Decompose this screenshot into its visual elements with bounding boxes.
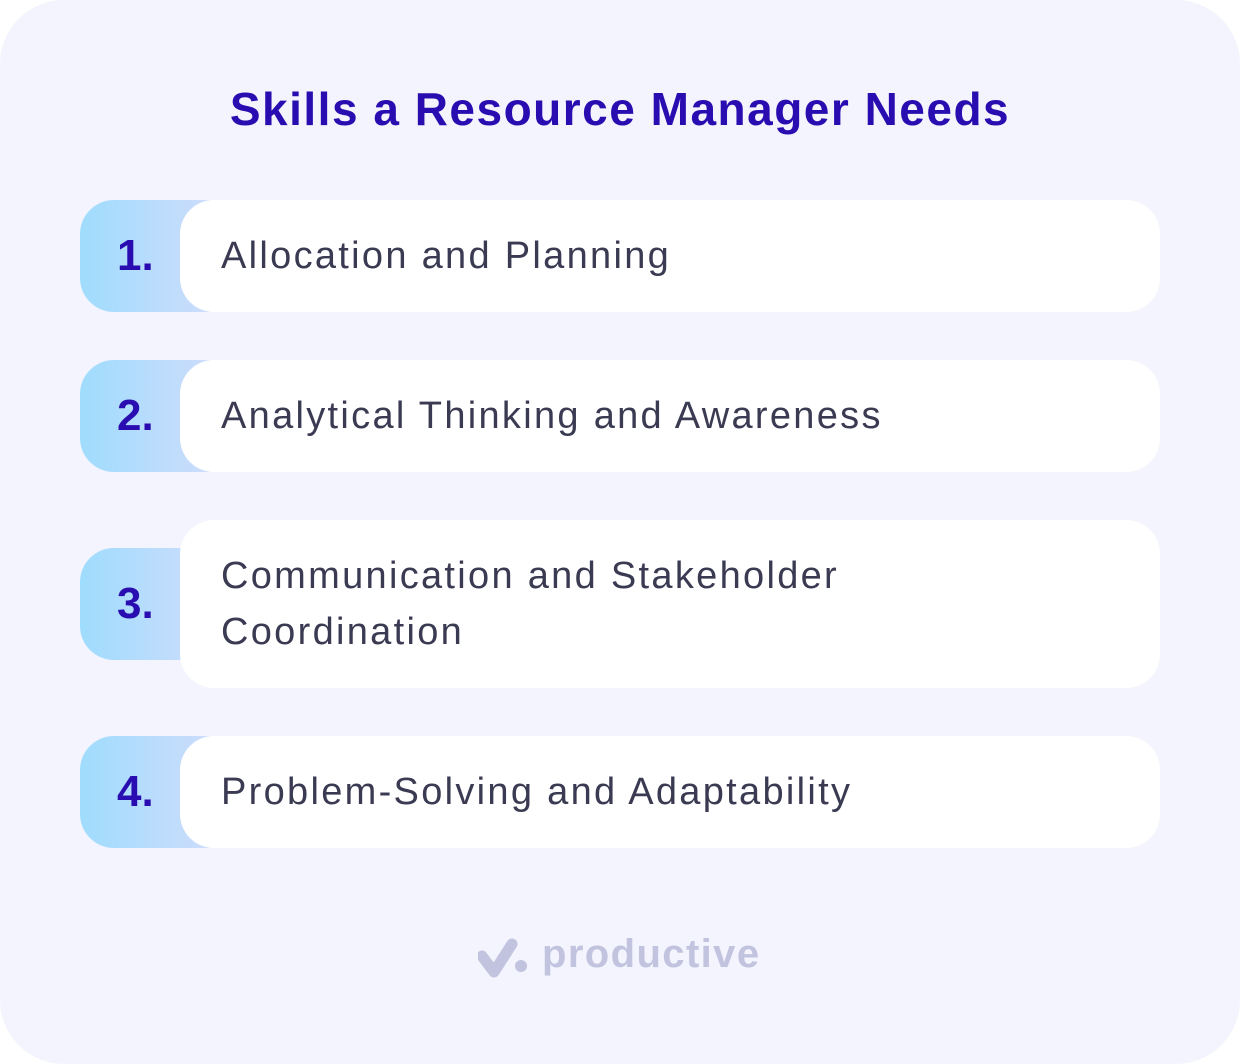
item 4: 4. (117, 767, 154, 816)
item 1: 1. (117, 231, 154, 280)
item 2 (80, 360, 1160, 472)
item 3 (80, 520, 1160, 688)
item 3: Coordination (221, 611, 464, 653)
item 3: Communication and Stakeholder (221, 555, 839, 597)
logo: productive (542, 932, 760, 976)
title: Skills a Resource Manager Needs (230, 83, 1010, 135)
item 4: Problem-Solving and Adaptability (221, 771, 852, 813)
item 3: 3. (117, 579, 154, 628)
icon: logo mark (478, 938, 527, 978)
item 1: Allocation and Planning (221, 235, 671, 277)
item 2: 2. (117, 391, 154, 440)
item 4 (80, 736, 1160, 848)
item 1 (80, 200, 1160, 312)
item 2: Analytical Thinking and Awareness (221, 395, 883, 437)
